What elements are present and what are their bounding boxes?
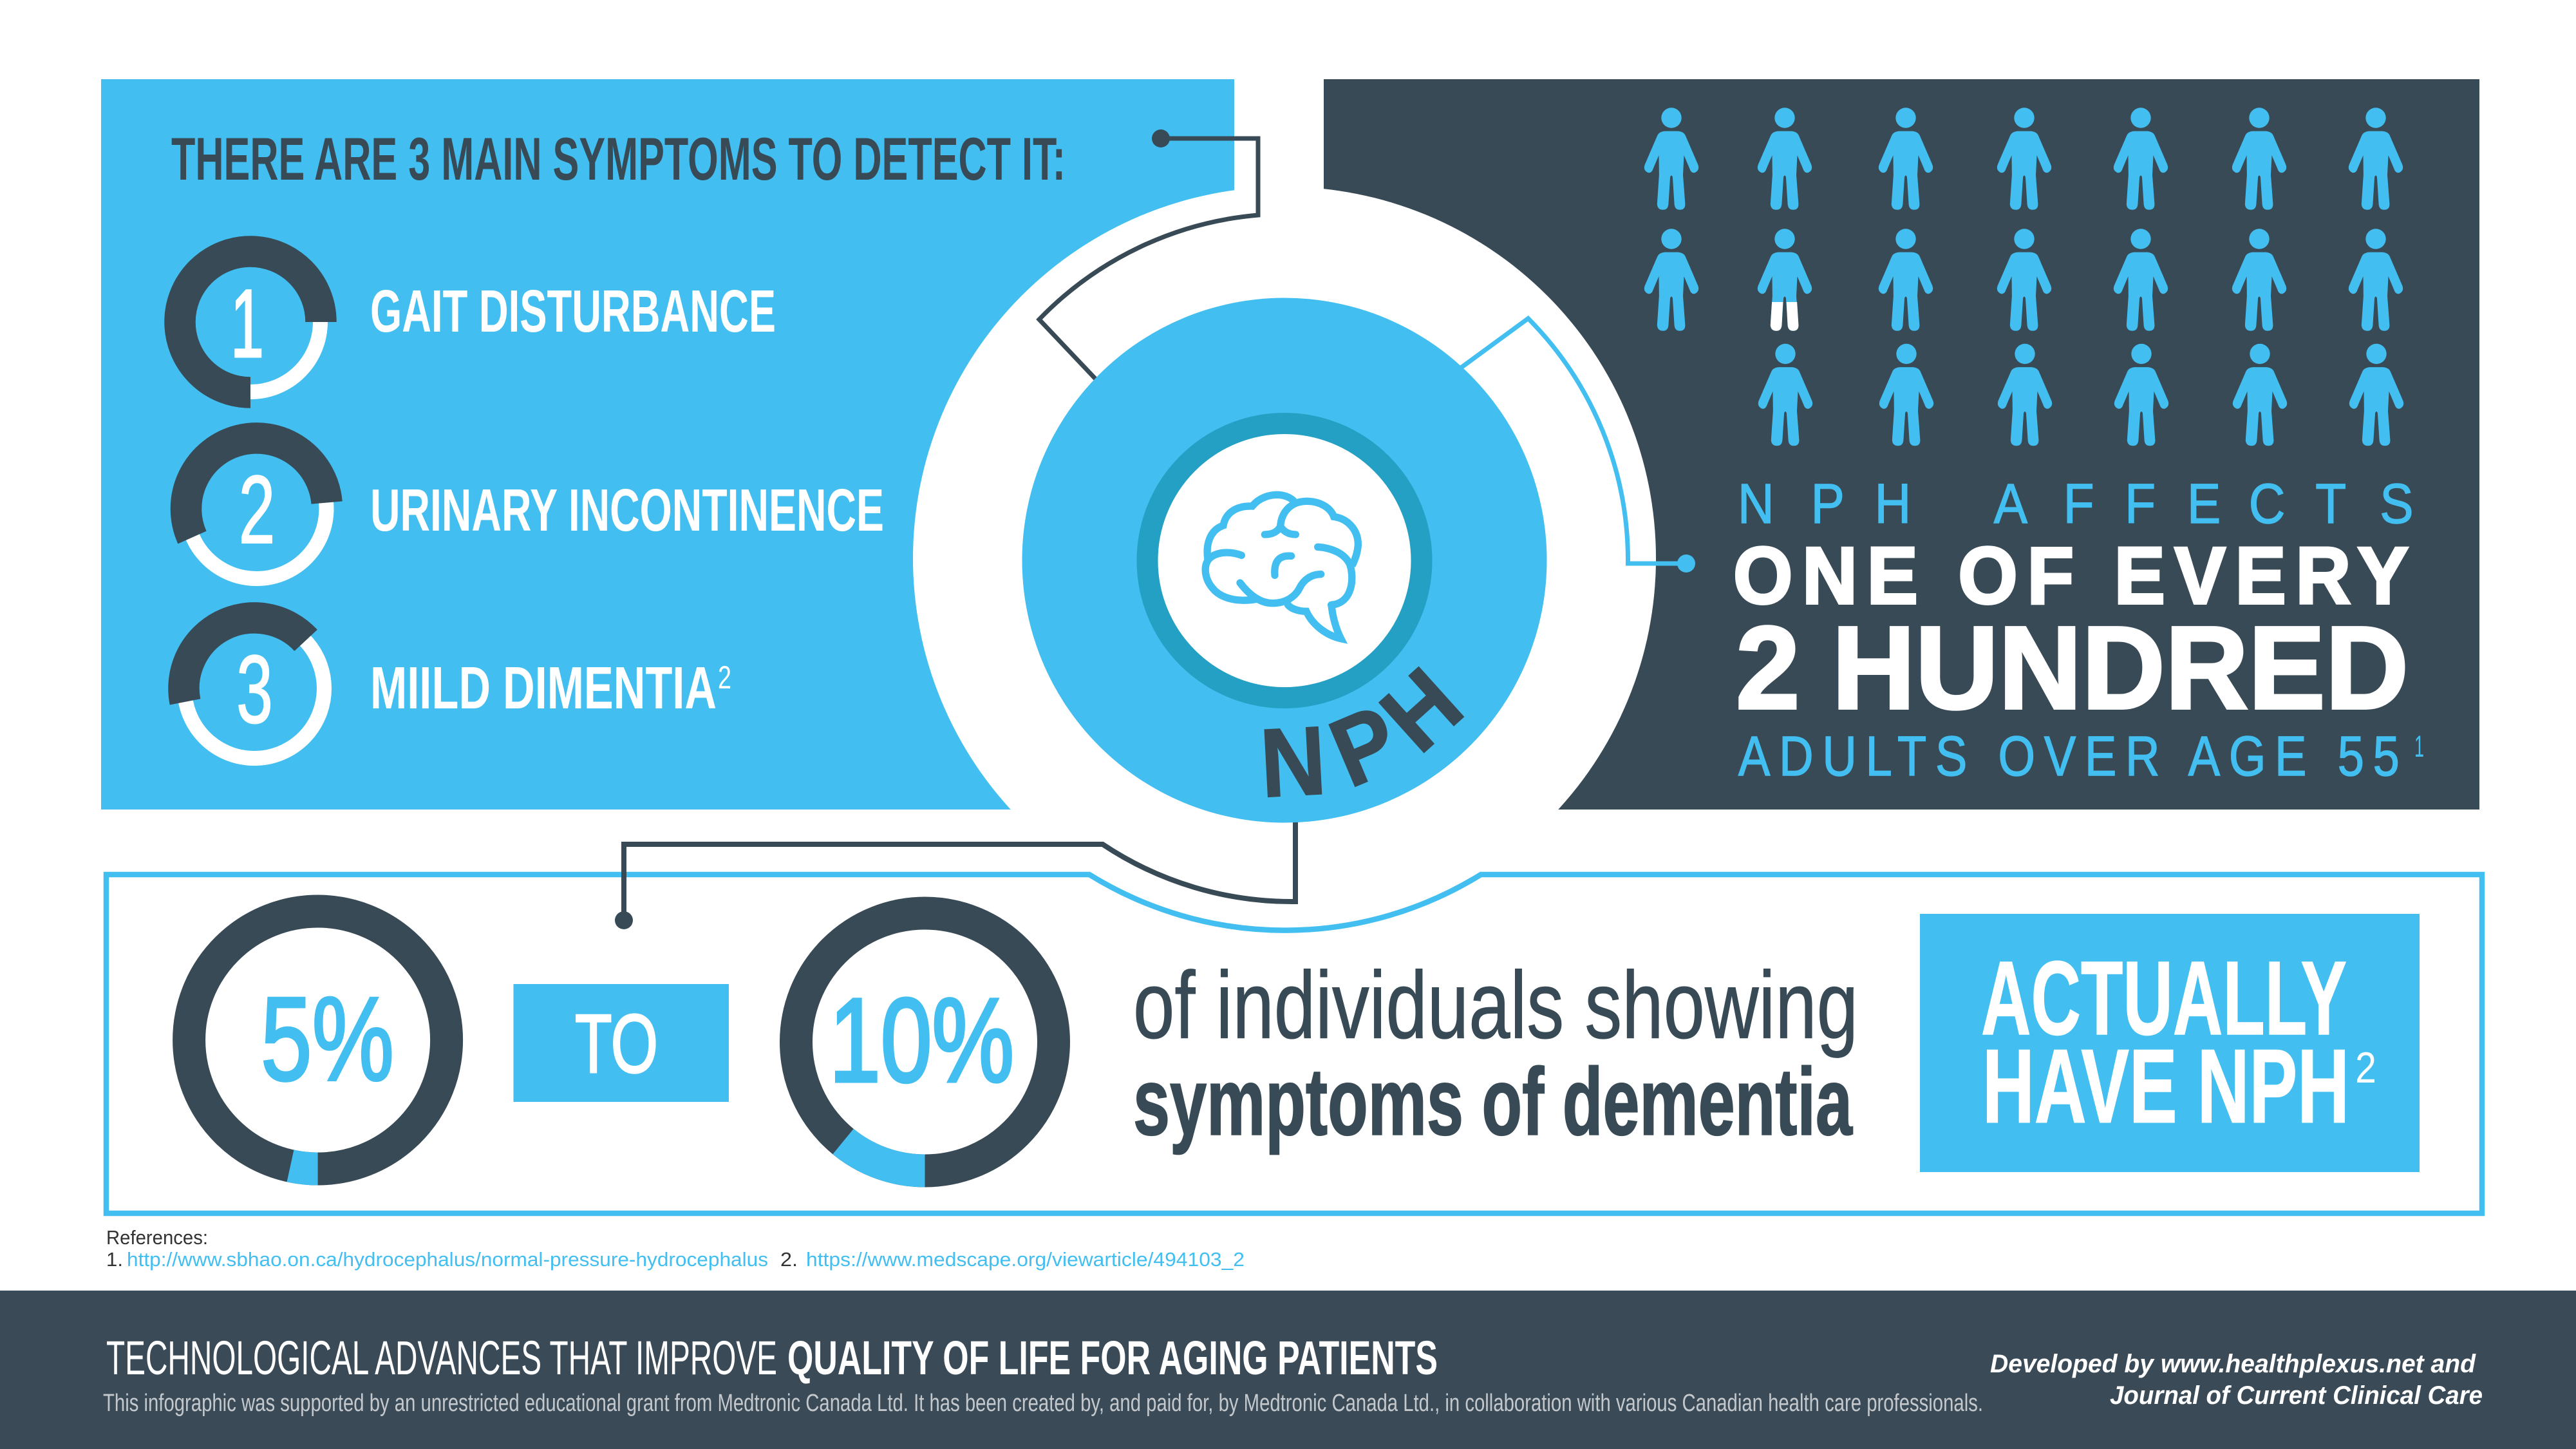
connector label: TO [514,984,729,1102]
donut chart: 5 percent [189,911,447,1169]
superscript reference 1: 1 [2414,729,2424,763]
number 1: 1 [230,270,264,377]
developer credit: Developed by www.healthplexus.net and [1990,1350,2477,1378]
callout: actually have NPH: HAVE NPH [1982,1027,2349,1145]
central NPH disc [1022,298,1547,823]
number 2: 2 [239,457,275,564]
sponsorship disclosure: This infographic was supported by an unrestricted educational grant from Medtronic Canada Ltd. It has been created by, and paid for, by Medtronic Canada Ltd., in collaboration with various Canadian health care professionals. [103,1390,1983,1417]
footer band [0,1291,2576,1449]
label: urinary incontinence: URINARY INCONTINENCE [370,477,884,544]
text: symptoms of dementia: symptoms of dementia [1133,1049,1853,1155]
text: adults over age 55: ADULTS OVER AGE 55 [1738,725,2400,788]
value: 5%: 5% [261,973,394,1106]
text: 2 hundred: 2 HUNDRED [1736,601,2409,734]
panel: prevalence background [1324,79,2479,810]
connector: symptoms to centre [1039,129,1258,381]
highlighted person [1758,229,1812,331]
connector: centre to prevalence [1458,318,1695,573]
panel: bottom statistic frame [106,875,2482,1213]
references: 2. [780,1248,798,1271]
pictogram: people grid [1644,108,2403,446]
value: 10%: 10% [829,974,1014,1107]
ring: symptom 1 [180,251,321,393]
references [106,1226,1245,1271]
references: 1. [106,1248,123,1271]
symptom 3 [183,618,731,759]
panel: symptoms background [101,79,1234,810]
callout: actually have NPH [1920,914,2420,1172]
icon: brain speech bubble [1205,495,1358,639]
label: gait disturbance: GAIT DISTURBANCE [370,278,776,345]
footer title: QUALITY OF LIFE FOR AGING PATIENTS [787,1331,1438,1385]
donut chart: 10 percent [796,913,1053,1171]
label: NPH on curve: P [1315,684,1413,808]
developer credit: Journal of Current Clinical Care [2110,1381,2483,1410]
heading: symptoms: THERE ARE 3 MAIN SYMPTOMS TO DETECT IT: [171,125,1066,193]
connector label: TO: TO [575,998,658,1090]
references: http://www.sbhao.on.ca/hydrocephalus/normal-pressure-hydrocephalus [127,1248,768,1271]
symptom 1 [180,251,776,393]
footer title: TECHNOLOGICAL ADVANCES THAT IMPROVE [106,1331,777,1385]
text: one of every: ONE OF EVERY [1733,531,2409,621]
number 3: 3 [236,636,273,744]
label: mild dementia: MIILD DIMENTIA [370,654,717,721]
text: of individuals showing: of individuals showing [1133,952,1858,1059]
developer credit [1990,1350,2483,1410]
central white circle [913,187,1656,930]
references: https://www.medscape.org/viewarticle/494103_2 [806,1248,1245,1271]
references: References: [106,1226,208,1249]
label: NPH on curve: H [1360,647,1482,772]
ring: symptom 3 [183,618,324,759]
label: NPH on curve: N [1257,706,1328,818]
label: NPH on curve [1257,647,1482,818]
ring: symptom 2 [186,438,327,578]
superscript reference 2: 2 [718,659,731,696]
connector: centre to statistic [615,818,1295,929]
text: NPH affects: NPH AFFECTS [1738,472,2413,535]
symptom 2 [186,438,884,578]
superscript reference 2: 2 [2355,1043,2376,1092]
callout: actually have NPH: ACTUALLY [1981,939,2347,1057]
